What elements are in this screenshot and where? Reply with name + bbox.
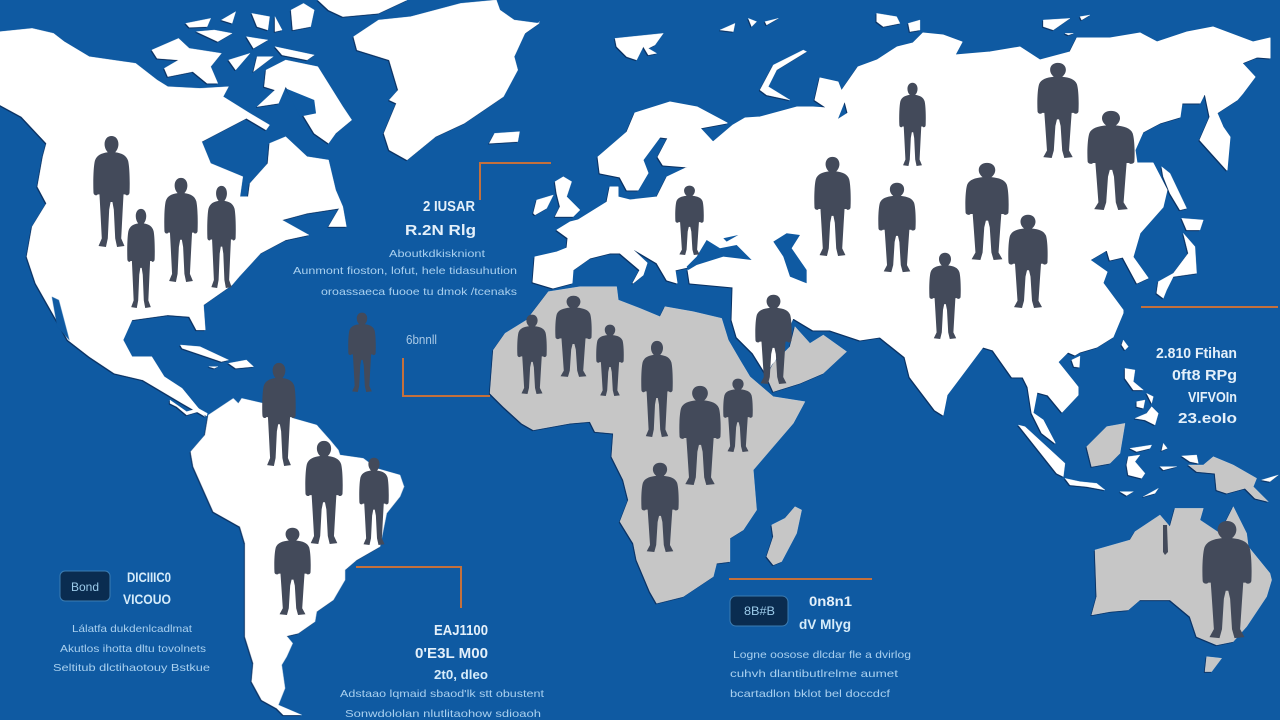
figure: asia [1008, 215, 1048, 308]
new guinea [1188, 457, 1268, 502]
figure: asia [1037, 63, 1079, 158]
northern islands [520, 13, 920, 38]
text block: north atlantic: R.2N Rlg [405, 222, 476, 239]
description: Adstaao lqmaid sbaod'lk stt obustent [340, 688, 544, 700]
japan and sakhalin [1122, 167, 1203, 350]
arabia [767, 327, 847, 392]
figure: australia [1202, 521, 1252, 638]
text block: western pacific: 23.eoIo [1178, 410, 1237, 427]
badge [60, 571, 110, 601]
tasmania [1205, 657, 1222, 672]
greenland [354, 0, 539, 160]
siberian islands [1043, 15, 1090, 35]
text block: south atlantic: 2t0, dleo [434, 667, 488, 682]
silhouette figures [93, 63, 1252, 638]
figure: africa [641, 463, 679, 552]
badge: 8B#B [744, 604, 775, 618]
map: inland seas [52, 88, 807, 341]
text block: north atlantic [293, 198, 517, 298]
eurasia [533, 27, 1270, 443]
philippines and indonesia [1018, 368, 1278, 497]
text block: indian ocean: dV Mlyg [799, 616, 851, 632]
map: grey regions [490, 287, 1272, 672]
text block: north atlantic: Aunmont fioston, lofut, hele tidasuhution [293, 265, 517, 277]
text block: south atlantic [340, 622, 544, 720]
figure: south america [305, 441, 343, 544]
hainan [1072, 356, 1080, 367]
leader line: west africa [403, 358, 490, 396]
label: small caption: 6bnnll [406, 332, 437, 347]
figure: asia [929, 253, 961, 339]
figure: africa [596, 325, 624, 396]
arctic islands [152, 0, 407, 143]
north america [0, 28, 346, 417]
text block: south pacific: VICOUO [123, 591, 171, 607]
figure: middle east [755, 295, 792, 384]
figure: south america [359, 458, 389, 545]
novaya zemlya [760, 50, 807, 100]
figure: africa [555, 296, 592, 377]
figure: africa [641, 341, 673, 437]
figure: asia [814, 157, 851, 256]
text block: south pacific: Seltitub dlctihaotouy Bstkue [53, 662, 210, 674]
badge: Bond [71, 580, 99, 594]
text block: western pacific [1156, 345, 1237, 427]
lake in australia [1163, 525, 1168, 555]
text block: south pacific: Akutlos ihotta dltu tovolnets [60, 643, 206, 655]
text block: indian ocean [730, 593, 911, 700]
leader line: south atlantic [729, 578, 872, 580]
description: Logne oosose dlcdar fle a dvirlog [733, 649, 911, 661]
figure: asia [1087, 111, 1135, 210]
orange leader lines [356, 163, 1278, 608]
text block: north atlantic: oroassaeca fuooe tu dmok /tcenaks [321, 286, 517, 298]
svalbard [615, 33, 663, 60]
leader line: pacific [1141, 306, 1278, 308]
text block: south atlantic: Sonwdololan nlutlitaohow sdioaoh [345, 708, 541, 720]
badge [730, 596, 788, 626]
borneo [1087, 423, 1125, 467]
australia [1092, 507, 1272, 645]
iceland [489, 132, 520, 143]
figure: ocean [348, 313, 376, 392]
figure: south america [262, 363, 296, 466]
africa [490, 287, 805, 603]
figure: africa [723, 379, 753, 452]
british isles [533, 177, 580, 217]
heading: DICIIIC0 [127, 569, 171, 585]
figure: south america [274, 528, 311, 615]
figure: north america [93, 136, 130, 247]
description: Lálatfa dukdenlcadlmat [72, 623, 192, 635]
figure: asia [878, 183, 916, 272]
description: Aboutkdkiskniont [389, 248, 485, 260]
hudson island channel [286, 88, 316, 117]
text block: western pacific: 0ft8 RPg [1172, 367, 1237, 384]
south america [191, 398, 404, 715]
caribbean [180, 345, 254, 368]
text block: south pacific [53, 569, 210, 674]
figure: africa [679, 386, 721, 485]
heading: 2 IUSAR [423, 198, 475, 215]
text block: indian ocean: cuhvh dlantibutlrelme aumet [730, 668, 898, 680]
heading: 0n8n1 [809, 593, 852, 609]
figure: north america [207, 186, 236, 288]
text block: indian ocean: bcartadlon bklot bel doccdcf [730, 688, 890, 700]
sea of azov [723, 235, 738, 242]
text block: south atlantic: 0'E3L M00 [415, 645, 488, 662]
text block: western pacific: VIFVOIn [1188, 389, 1237, 406]
leader line: north atlantic [480, 163, 551, 200]
figure: asia [899, 83, 926, 166]
figure: africa [517, 315, 547, 394]
figure: north america [127, 209, 155, 308]
heading: EAJ1100 [434, 622, 488, 639]
text block: western pacific: 2.810 Ftihan [1156, 345, 1237, 362]
black sea [687, 240, 752, 270]
leader line: south america [356, 567, 461, 608]
figure: europe [675, 186, 704, 255]
caspian sea [773, 233, 807, 283]
central america [170, 400, 207, 416]
figure: north america [164, 178, 198, 282]
gulf of california [52, 297, 70, 341]
madagascar [767, 507, 802, 565]
figure: asia [965, 163, 1009, 260]
